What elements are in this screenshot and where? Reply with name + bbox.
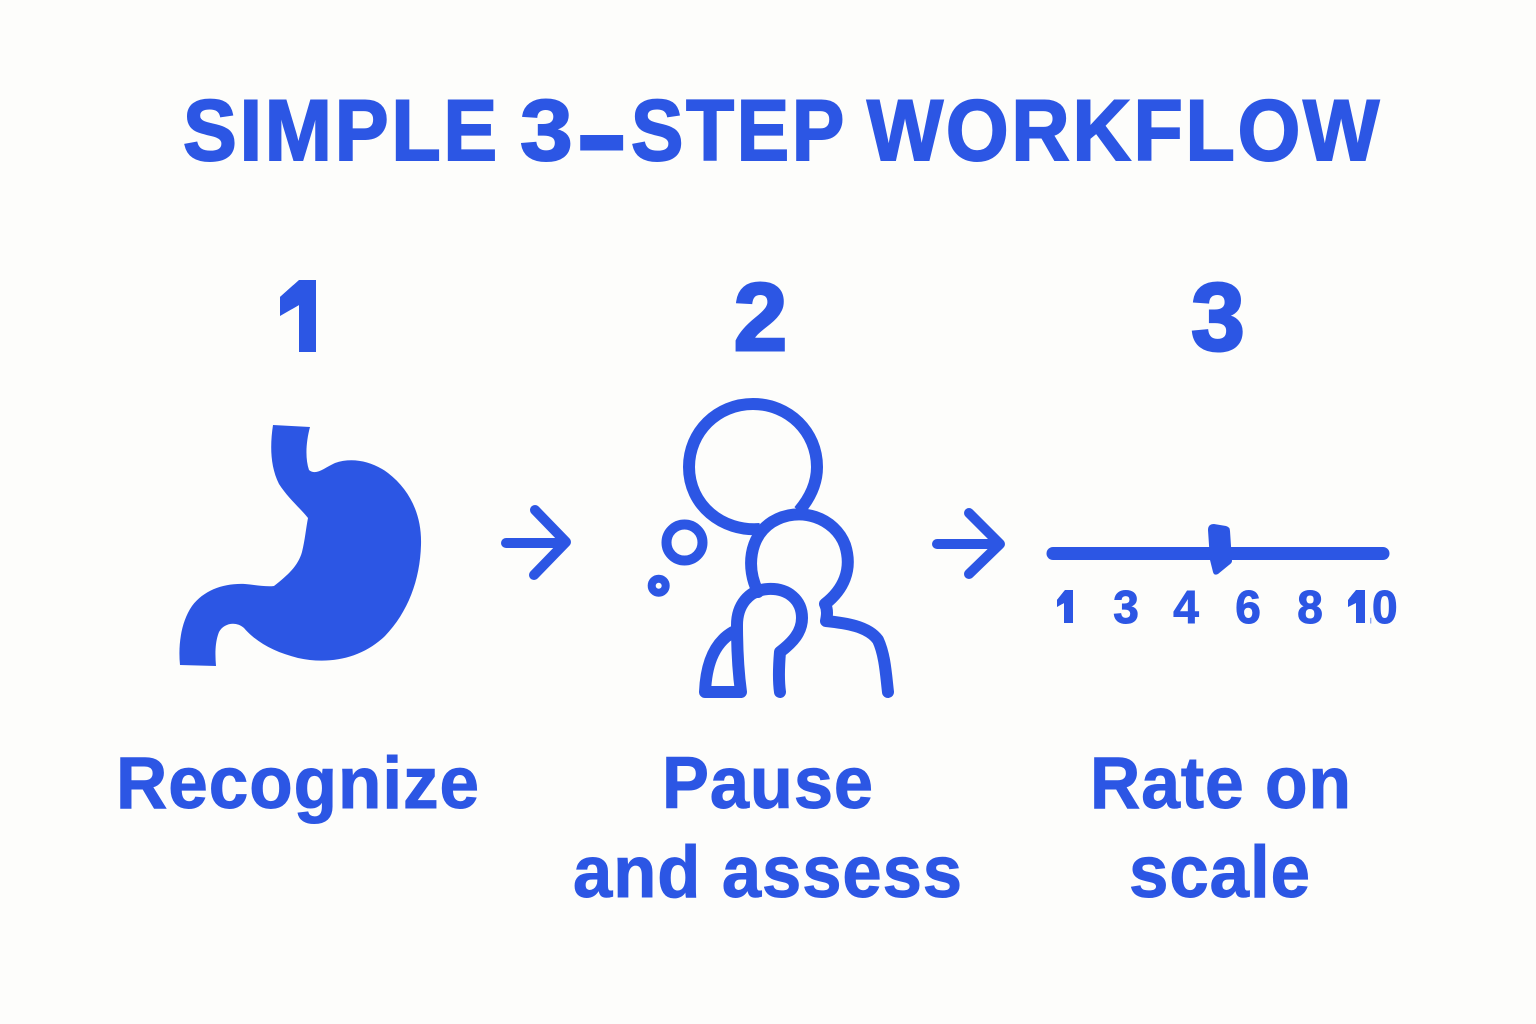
scale numbers: 3: [1113, 581, 1139, 633]
title: WORKFLOW: [867, 83, 1382, 179]
step number 1: 1: [269, 265, 323, 372]
label: Rate on scale: [1090, 743, 1352, 913]
scale numbers: [1057, 590, 1396, 624]
label: Rate on scale: scale: [1129, 832, 1311, 913]
title: SIMPLE: [183, 83, 500, 179]
arrow: step 2 to 3: [937, 513, 1000, 574]
scale numbers: 1: [1052, 581, 1078, 633]
label: Pause and assess: Pause: [662, 743, 874, 824]
label: Pause and assess: [573, 743, 963, 913]
scale numbers: 10: [1346, 581, 1398, 633]
label: Recognize: Recognize: [116, 743, 480, 824]
icon: people pausing with thought bubbles: [652, 404, 888, 692]
step number 3: 3: [1191, 264, 1245, 371]
label: Pause and assess: and assess: [573, 832, 963, 913]
icon: rating scale: [1052, 524, 1398, 633]
scale numbers: 6: [1235, 581, 1261, 633]
title: 3: [520, 83, 576, 179]
title: [183, 83, 1382, 185]
icon: stomach: [179, 425, 421, 666]
step number 2: 2: [734, 264, 787, 371]
step number 1: [280, 280, 316, 352]
label: Rate on scale: Rate on: [1090, 743, 1352, 824]
scale numbers: 8: [1297, 581, 1323, 633]
title: STEP: [631, 83, 847, 179]
arrow: step 1 to 2: [506, 510, 566, 575]
title: –: [581, 89, 625, 185]
scale numbers: 4: [1173, 581, 1199, 633]
